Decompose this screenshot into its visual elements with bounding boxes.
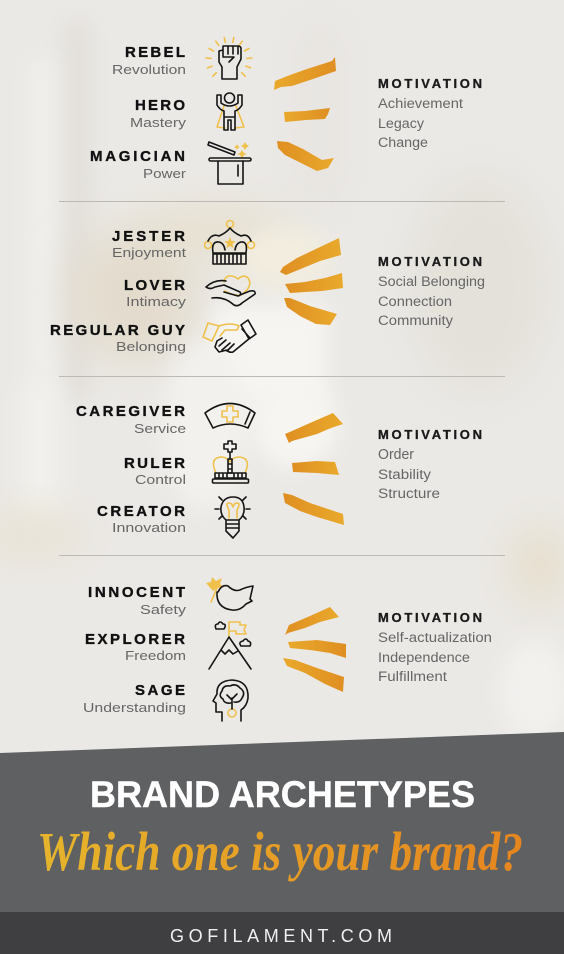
archetype: regular guy: REGULAR GUY	[50, 322, 185, 339]
icon: handshake	[203, 320, 256, 352]
motivation text 1	[378, 76, 482, 150]
brush stroke: sage	[283, 658, 344, 692]
archetype: creator: CREATOR	[97, 503, 185, 520]
archetype: jester	[112, 228, 186, 260]
motivation text 4: Independence	[378, 650, 470, 665]
motivation text 2: Connection	[378, 294, 452, 309]
brush stroke: hero	[284, 108, 330, 122]
brush stroke: innocent	[285, 607, 339, 635]
heading: brand archetypes: BRAND ARCHETYPES	[90, 774, 475, 815]
archetype: explorer	[85, 631, 186, 663]
archetype: caregiver: CAREGIVER	[76, 403, 185, 420]
archetype: ruler	[124, 455, 186, 487]
archetype: creator: Innovation	[112, 520, 186, 535]
icon: magic hat and wand	[208, 142, 251, 184]
archetype: rebel	[112, 44, 186, 77]
archetype: rebel: REBEL	[125, 44, 185, 61]
motivation text 2: MOTIVATION	[378, 254, 482, 269]
motivation text 1: Achievement	[378, 96, 463, 111]
archetype: magician: Power	[143, 166, 187, 181]
brush stroke: lover	[285, 273, 343, 293]
archetype: caregiver	[76, 403, 186, 436]
footer url: GOFILAMENT.COM	[170, 926, 392, 946]
archetype: rebel: Revolution	[112, 62, 186, 77]
archetype: innocent: INNOCENT	[88, 584, 185, 601]
blurred photo background	[0, 0, 564, 760]
archetype: lover	[124, 277, 187, 309]
archetype: hero	[130, 97, 187, 130]
brush stroke: explorer	[288, 640, 346, 658]
archetype: sage: SAGE	[135, 682, 185, 699]
icon: nurse cap	[205, 404, 255, 428]
archetype: creator	[97, 503, 186, 535]
icon: head with brain tree	[213, 680, 248, 721]
footer bar	[0, 912, 564, 954]
motivation text 3	[378, 427, 482, 501]
brush stroke: jester	[280, 238, 341, 275]
archetype: ruler: RULER	[124, 455, 185, 472]
brush stroke: magician	[277, 141, 334, 171]
archetype: sage	[83, 682, 186, 715]
icon: jester hat	[204, 220, 254, 264]
archetype: hero: HERO	[135, 97, 185, 114]
motivation text 1: MOTIVATION	[378, 76, 482, 91]
archetype: explorer: Freedom	[125, 648, 186, 663]
archetype: magician: MAGICIAN	[90, 148, 185, 165]
archetype: jester: JESTER	[112, 228, 185, 245]
motivation text 3: Stability	[378, 467, 431, 482]
motivation text 1: Legacy	[378, 116, 424, 131]
motivation text 3: MOTIVATION	[378, 427, 482, 442]
archetype: regular guy: Belonging	[116, 339, 186, 354]
brush stroke: rebel	[274, 57, 336, 90]
archetype: explorer: EXPLORER	[85, 631, 185, 648]
brush stroke: caregiver	[285, 413, 343, 443]
archetype: magician	[90, 148, 187, 181]
archetype: jester: Enjoyment	[112, 245, 186, 260]
icon: dove with olive branch	[206, 577, 253, 610]
archetype: ruler: Control	[135, 472, 186, 487]
archetype: hero: Mastery	[130, 115, 187, 130]
motivation text 4: Fulfillment	[378, 669, 447, 684]
archetype: innocent: Safety	[140, 602, 187, 617]
motivation text 2	[378, 254, 485, 328]
archetype: innocent	[88, 584, 187, 617]
archetype: lover: Intimacy	[126, 294, 187, 309]
title banner	[0, 732, 564, 912]
brush stroke: creator	[283, 493, 344, 525]
icon: crown	[212, 441, 248, 483]
motivation text 3: Order	[378, 447, 414, 463]
motivation text 4: MOTIVATION	[378, 610, 482, 625]
icon: heart in hands	[206, 276, 255, 306]
archetype: lover: LOVER	[124, 277, 185, 294]
brush stroke: regular guy	[284, 298, 337, 325]
motivation text 1: Change	[378, 135, 428, 150]
panel: motivation group 1	[90, 38, 482, 184]
motivation text 2: Social Belonging	[378, 274, 485, 289]
panel: motivation group 4	[83, 577, 492, 721]
archetype: regular guy	[50, 322, 186, 354]
motivation text 2: Community	[378, 313, 453, 328]
icon: mountain with flag	[209, 622, 251, 669]
icon: caped hero	[217, 93, 244, 130]
brush stroke: ruler	[292, 461, 339, 475]
archetype: caregiver: Service	[134, 421, 186, 436]
archetype: sage: Understanding	[83, 700, 186, 715]
panel: motivation group 3	[76, 403, 482, 538]
icon: raised fist	[206, 38, 252, 79]
motivation text 4: Self-actualization	[378, 630, 492, 645]
panel: motivation group 2	[50, 220, 485, 354]
motivation text 3: Structure	[378, 486, 440, 501]
icon: light bulb pencil	[215, 497, 250, 538]
motivation text 4	[378, 610, 492, 684]
